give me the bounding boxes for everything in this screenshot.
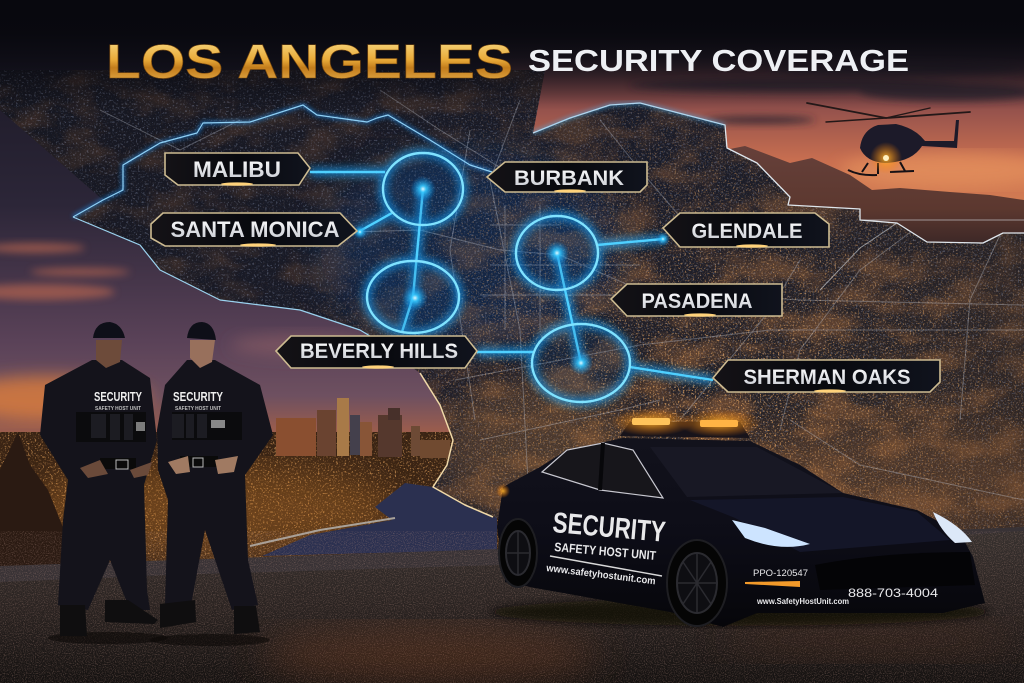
car livery: SAFETY HOST UNIT <box>554 540 657 563</box>
label: Pasadena: PASADENA <box>642 290 752 313</box>
zone hubs <box>353 176 670 375</box>
hood sheen <box>690 497 950 552</box>
title: SECURITY COVERAGE <box>528 43 909 78</box>
label: Glendale: GLENDALE <box>692 220 802 243</box>
security car <box>490 408 990 627</box>
officer left: SAFETY HOST UNIT <box>95 406 142 412</box>
title: LOS ANGELES <box>106 36 513 89</box>
trees <box>0 432 64 568</box>
label: Malibu: MALIBU <box>193 157 281 182</box>
label: Beverly Hills: BEVERLY HILLS <box>300 340 458 363</box>
skyline buildings <box>276 398 450 458</box>
connector lines <box>310 172 713 380</box>
car livery: PPO-120547 <box>753 568 808 578</box>
zone rings <box>367 153 630 402</box>
title <box>106 36 909 89</box>
car livery: SECURITY <box>551 507 667 549</box>
coverage zone glows <box>310 153 713 402</box>
car livery <box>545 507 938 606</box>
label: Pasadena <box>611 284 782 317</box>
wheels <box>499 519 727 626</box>
windshield <box>650 447 843 497</box>
officer right: SECURITY <box>173 389 223 404</box>
car body <box>497 438 985 627</box>
label: Beverly Hills <box>276 336 477 369</box>
label: Malibu <box>165 153 310 186</box>
road network <box>100 90 1024 520</box>
officer left: SECURITY <box>94 389 142 404</box>
headlights <box>732 520 810 547</box>
officers <box>40 322 273 646</box>
ground and curb <box>0 527 1024 683</box>
light bar <box>620 422 750 438</box>
icon: helicopter <box>807 103 970 175</box>
top dark band <box>0 0 1024 110</box>
bay water <box>262 483 497 556</box>
map of Los Angeles <box>0 70 1024 530</box>
label: Glendale <box>663 213 829 248</box>
officer left <box>40 322 168 644</box>
officer right <box>150 322 273 646</box>
label: Santa Monica: SANTA MONICA <box>170 217 340 242</box>
label: Burbank <box>487 162 647 193</box>
coverage boundary <box>73 103 1024 517</box>
car livery: www.SafetyHostUnit.com <box>756 597 849 606</box>
label: Santa Monica <box>151 213 357 247</box>
label: Sherman Oaks <box>713 360 940 393</box>
city skyline and bay <box>0 398 500 568</box>
label: Burbank: BURBANK <box>514 167 624 190</box>
officer right: SAFETY HOST UNIT <box>175 406 222 412</box>
front grille <box>815 552 975 590</box>
mountains behind map <box>725 146 1024 260</box>
car livery: 888-703-4004 <box>848 586 938 600</box>
car livery: www.safetyhostunit.com <box>545 563 656 587</box>
label: Sherman Oaks: SHERMAN OAKS <box>744 366 910 389</box>
side windows <box>542 443 663 498</box>
